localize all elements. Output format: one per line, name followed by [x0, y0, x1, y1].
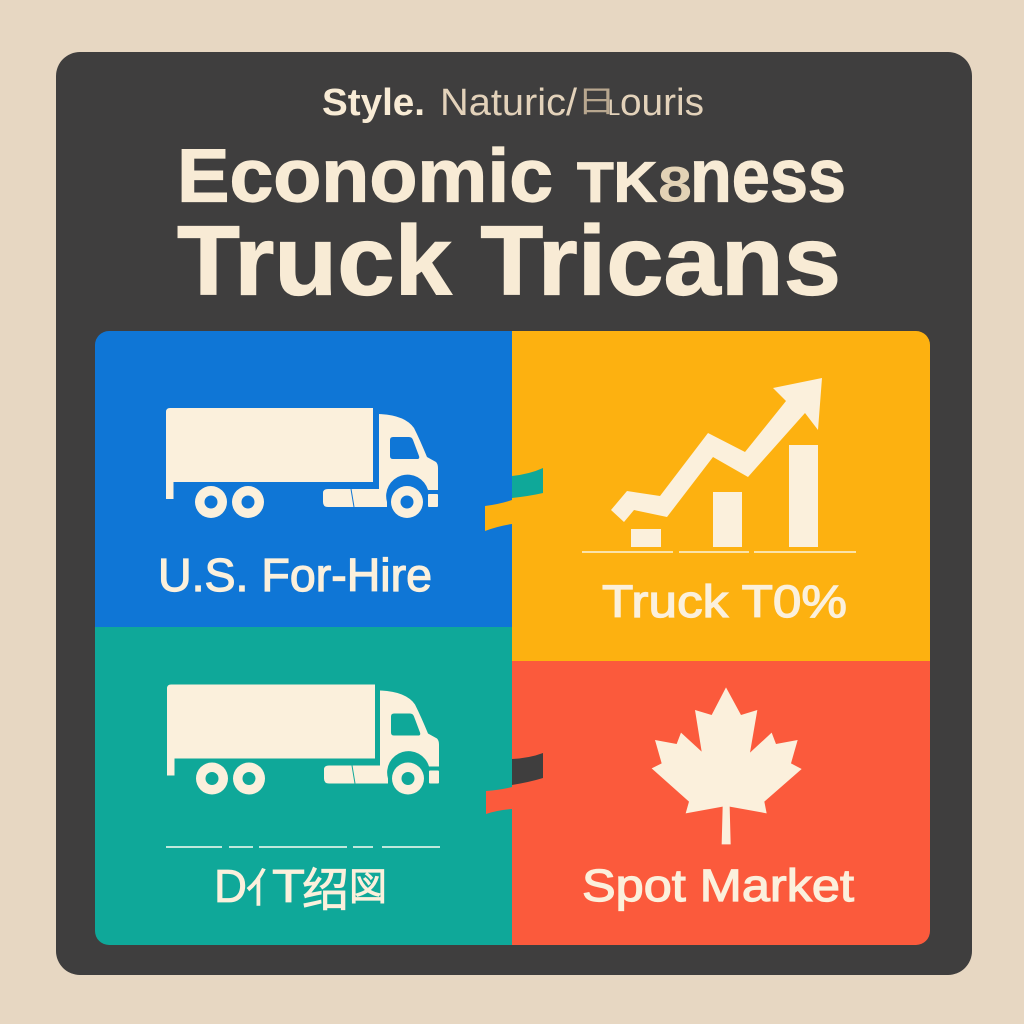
subtitle: 日 — [577, 86, 616, 119]
icon: maple leaf — [652, 687, 802, 844]
label: teal garbled text: 図 — [349, 867, 387, 909]
subtitle: L — [608, 95, 620, 120]
label: teal garbled text — [214, 860, 387, 916]
title: ness — [690, 134, 846, 218]
dashed rule — [166, 846, 440, 848]
label: teal garbled text: 亻 — [246, 867, 286, 911]
label: teal garbled text: D — [214, 860, 247, 912]
title — [177, 134, 846, 316]
label: teal garbled text: 绍 — [302, 864, 349, 916]
label: Spot Market: Spot Market — [582, 860, 855, 911]
quadrant grid — [95, 331, 930, 945]
icon: rising chart — [582, 378, 856, 552]
title: Truck Tricans — [177, 206, 841, 316]
panel: yellow — [512, 331, 930, 661]
subtitle — [322, 82, 704, 124]
subtitle: Style. — [322, 82, 425, 124]
panel: teal — [95, 627, 512, 945]
panel: blue — [95, 331, 512, 627]
title: 8 — [658, 156, 692, 212]
subtitle: ouris — [620, 82, 704, 124]
label: U.S. For-Hire: U.S. For-Hire — [158, 549, 432, 601]
title: TK — [577, 150, 657, 214]
subtitle: Naturic/ — [440, 82, 577, 124]
ribbon connector: bottom — [486, 753, 543, 814]
icon: truck teal — [167, 684, 439, 794]
label: teal garbled text: T — [272, 860, 305, 912]
ribbon connector: top — [485, 468, 543, 531]
panel: red — [512, 661, 930, 945]
title: Economic — [177, 134, 553, 218]
label: Truck T0%: Truck T0% — [602, 576, 847, 627]
icon: truck blue — [166, 408, 438, 518]
